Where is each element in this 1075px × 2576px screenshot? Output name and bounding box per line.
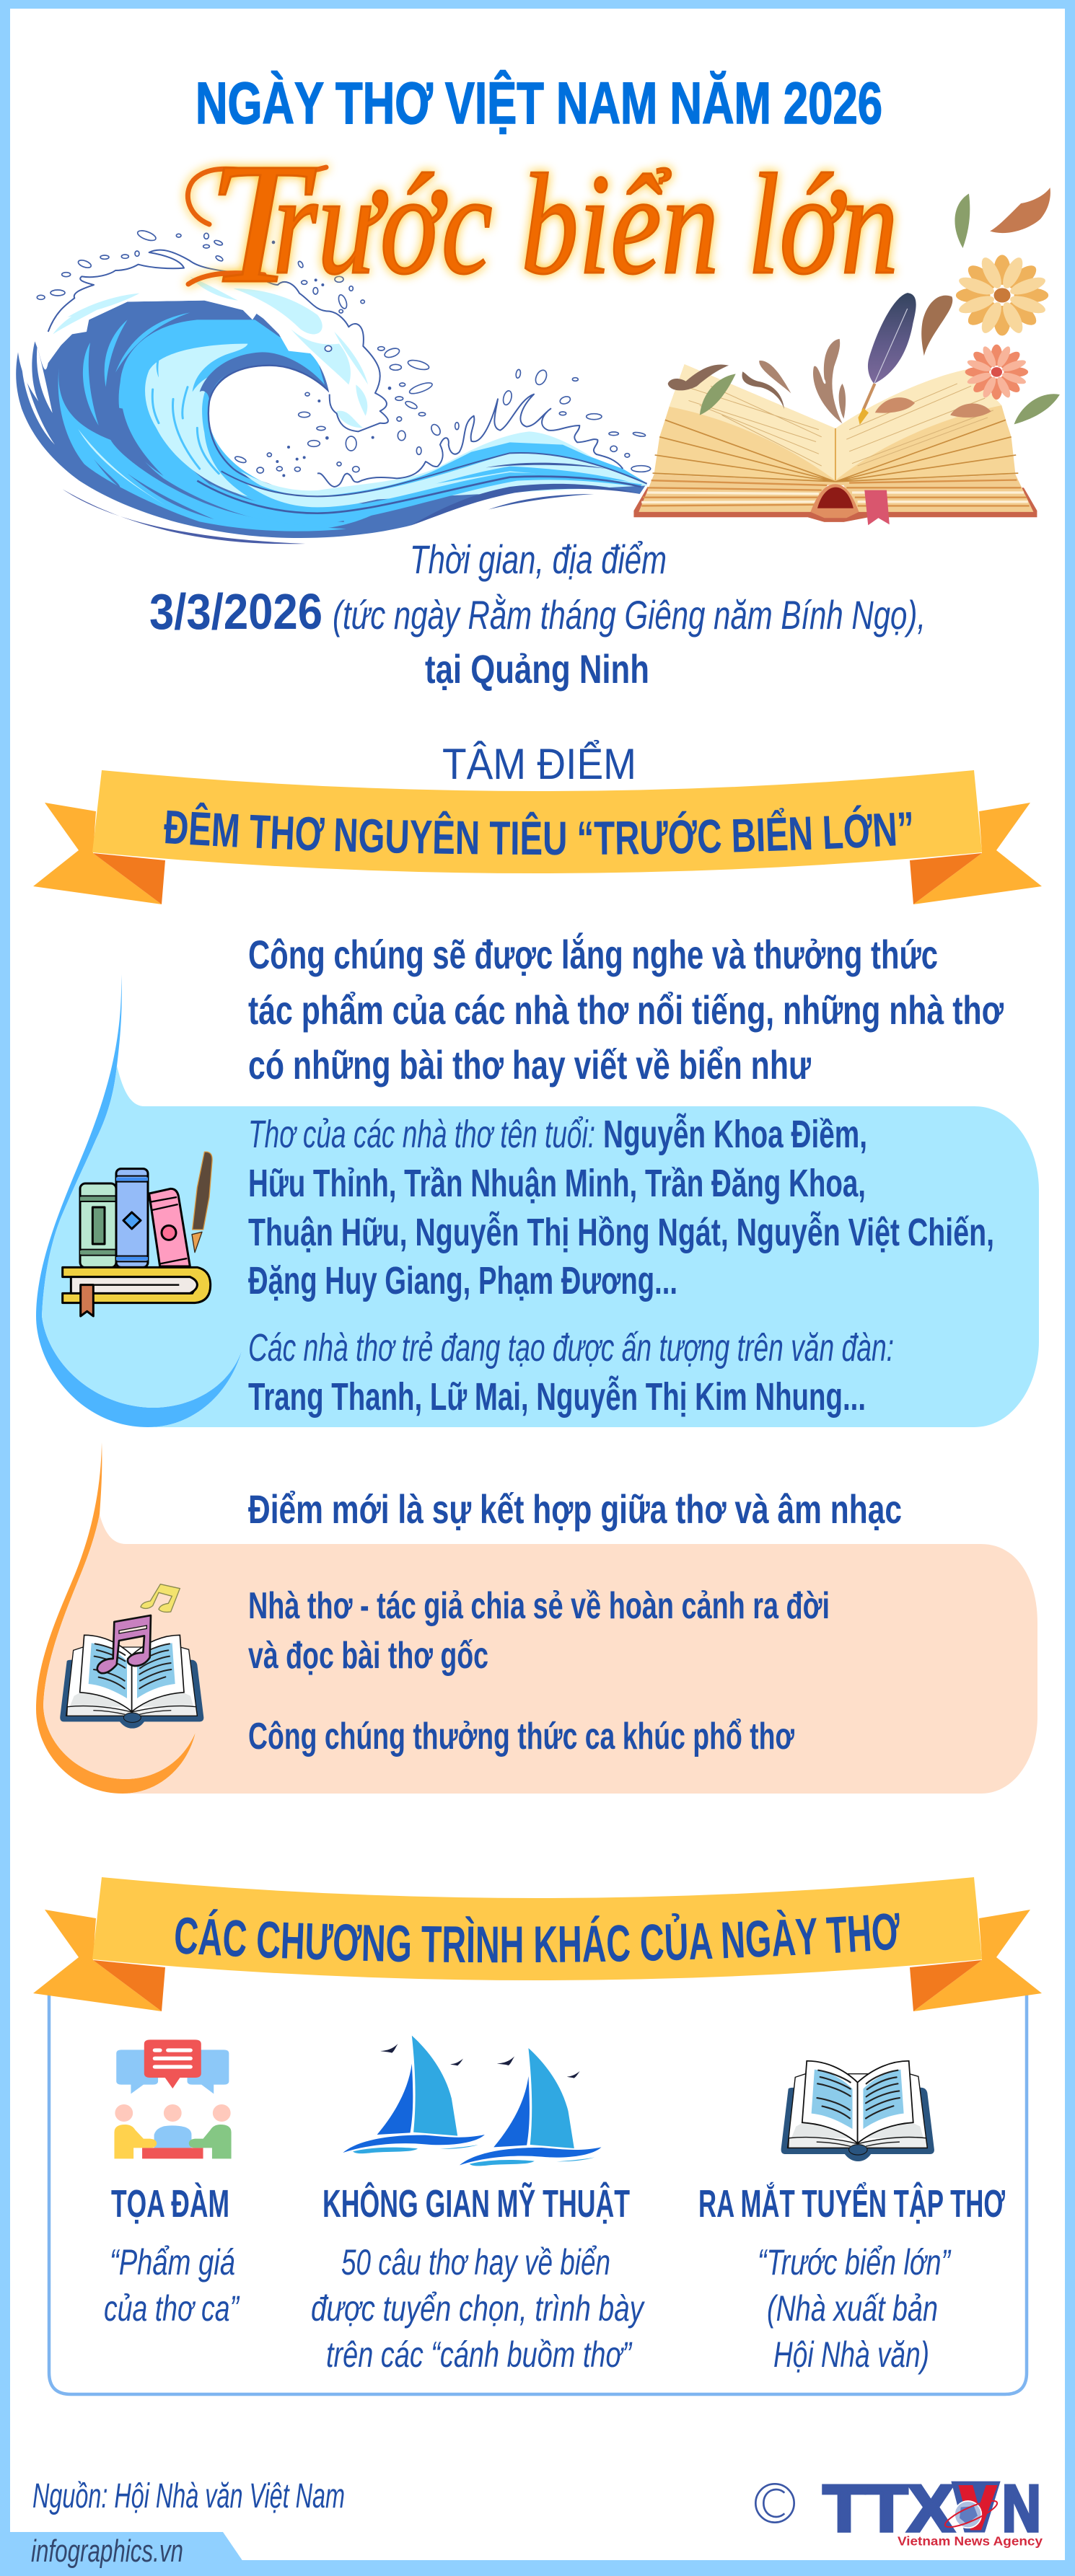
- column: anthology: [698, 2061, 1005, 2375]
- panel text: Nhà thơ - tác giả chia sẻ về hoàn cảnh ra đời: [248, 1585, 830, 1627]
- panel text: [248, 1585, 830, 1757]
- column: art space: [311, 2036, 645, 2375]
- date: 3/3/2026: [149, 583, 322, 640]
- ribbon banner 1: [33, 770, 1042, 904]
- label: TÂM ĐIỂM: TÂM ĐIỂM: [442, 740, 636, 788]
- source: Nguồn: Hội Nhà văn Việt Nam: [32, 2477, 345, 2515]
- book page block: [639, 475, 1033, 512]
- panel text: và đọc bài thơ gốc: [248, 1635, 488, 1677]
- subtitle: Trước biển lớn: T: [208, 127, 317, 319]
- panel: peach music: [36, 1442, 1037, 1794]
- panel: blue poets: [36, 974, 1039, 1427]
- column text: trên các “cánh buồm thơ”: [326, 2334, 633, 2375]
- column text: Hội Nhà văn): [773, 2334, 929, 2375]
- flower: yellow: [956, 255, 1048, 336]
- open book with feather, flowers and leaves: [633, 188, 1060, 525]
- column text: “Phẩm giá: [110, 2242, 235, 2282]
- column text: [758, 2242, 952, 2375]
- wave body: [16, 301, 647, 544]
- subtitle: Trước biển lớn: [188, 127, 898, 319]
- column: talk: [104, 2039, 240, 2329]
- column text: (Nhà xuất bản: [767, 2288, 938, 2329]
- poet list: [248, 1113, 994, 1419]
- logo: TTXVN: TTX: [823, 2472, 954, 2545]
- panel text: Công chúng thưởng thức ca khúc phổ thơ: [248, 1716, 794, 1757]
- poet list: Thơ của các nhà thơ tên tuổi:: [248, 1113, 595, 1156]
- icon: book with music notes: [60, 1584, 203, 1729]
- logo: TTXVN: [755, 2472, 1043, 2548]
- feather pen: [858, 293, 916, 425]
- copyright mark: [755, 2484, 794, 2523]
- intro text: có những bài thơ hay viết về biển như: [248, 1042, 811, 1088]
- logo: TTXVN: N: [1002, 2472, 1041, 2545]
- subtitle: Trước biển lớn: rước biển lớn: [273, 145, 898, 304]
- icon: open book: [781, 2061, 934, 2161]
- ribbon heading: CÁC CHƯƠNG TRÌNH KHÁC CỦA NGÀY THƠ: [175, 1909, 899, 1963]
- book fanned pages: [653, 364, 1018, 482]
- book cover: [633, 488, 1037, 522]
- leaves: [668, 188, 1060, 424]
- column text: [311, 2242, 645, 2375]
- icon: sailboats and birds: [343, 2036, 601, 2166]
- column text: của thơ ca”: [104, 2288, 240, 2329]
- water droplets: [37, 229, 651, 477]
- column text: được tuyển chọn, trình bày: [311, 2288, 645, 2329]
- wave tail: [197, 394, 647, 525]
- icon: discussion: [114, 2039, 232, 2158]
- column text: 50 câu thơ hay về biển: [341, 2242, 610, 2282]
- website: infographics.vn: [31, 2533, 183, 2569]
- place: tại Quảng Ninh: [425, 646, 649, 692]
- logo: TTXVN: Vietnam News Agency: [898, 2533, 1043, 2548]
- poet list: Đặng Huy Giang, Phạm Đương...: [248, 1259, 677, 1302]
- wave foam crest: [48, 250, 388, 431]
- wave illustration: [16, 229, 651, 544]
- column heading: TỌA ĐÀM: [111, 2182, 229, 2226]
- intro text: [248, 932, 1004, 1088]
- time and place block: [149, 537, 926, 692]
- footer tab: [0, 2532, 243, 2562]
- flower: coral: [965, 345, 1028, 400]
- column text: “Trước biển lớn”: [758, 2242, 952, 2282]
- time label: Thời gian, địa điểm: [410, 537, 667, 582]
- ribbon banner 2: [33, 1877, 1042, 2011]
- column heading: KHÔNG GIAN MỸ THUẬT: [322, 2182, 630, 2226]
- ribbon heading: ĐÊM THƠ NGUYÊN TIÊU “TRƯỚC BIỂN LỚN”: [164, 802, 911, 855]
- icon: books and pen: [63, 1152, 212, 1316]
- book spine arch and bookmark: [810, 484, 890, 525]
- poet list: Nguyễn Khoa Điềm,: [603, 1113, 867, 1156]
- column text: [104, 2242, 240, 2329]
- panel outline: other programs: [49, 1990, 1027, 2394]
